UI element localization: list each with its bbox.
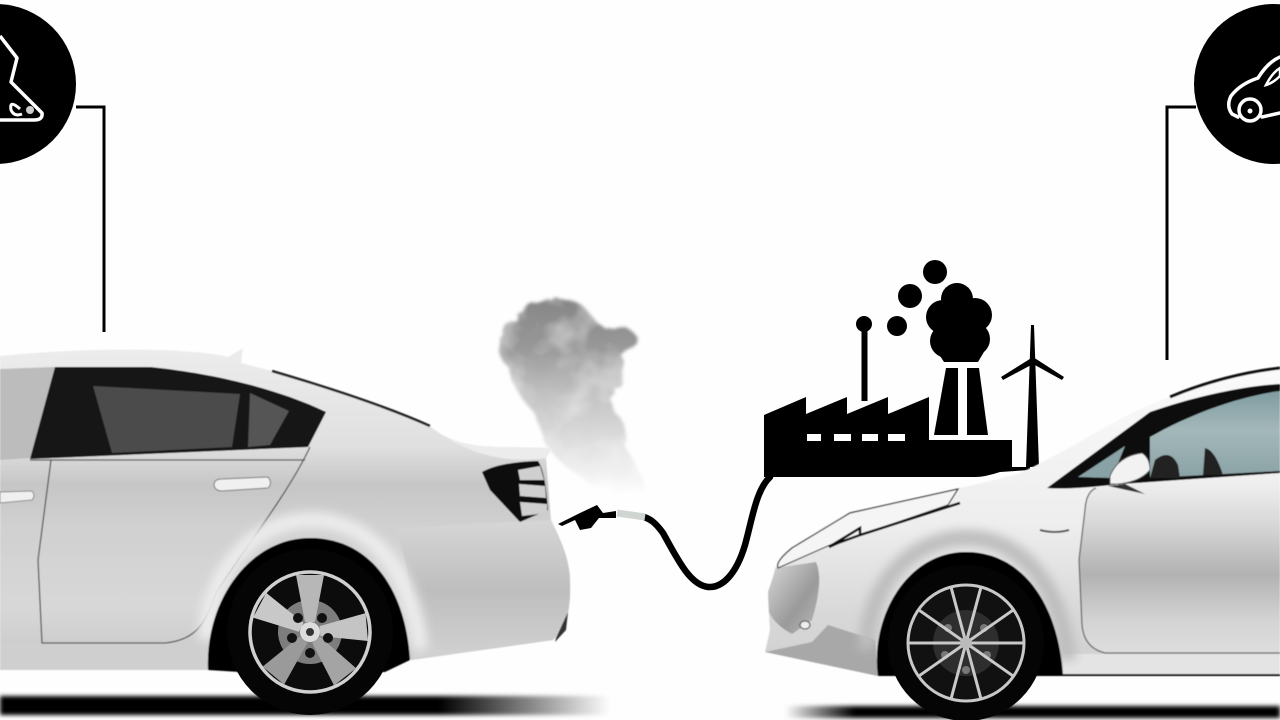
fender trim: [1040, 530, 1069, 532]
wheel arch: [208, 538, 410, 672]
rear side glass: [93, 386, 240, 453]
door handle front: [0, 491, 34, 503]
rear bumper shading: [395, 520, 570, 660]
hose collar: [617, 513, 645, 517]
icon: engine badge with connector: [0, 4, 104, 332]
window surround: [1047, 384, 1280, 489]
front quarter glass: [1078, 446, 1125, 478]
car body: [0, 348, 570, 670]
door panel: [1079, 472, 1280, 653]
car body: [765, 368, 1280, 676]
rear quarter glass: [248, 393, 289, 447]
door lines: [30, 447, 310, 643]
exhaust smoke cloud: [499, 299, 646, 493]
cooling tower: [934, 368, 958, 435]
door handle rear: [214, 477, 270, 491]
thin chimney: [862, 326, 868, 401]
wheel arch flare: [206, 520, 420, 650]
smoke puffs: [923, 260, 947, 284]
icon: electric car badge with connector: [1167, 4, 1280, 360]
bumper intake: [768, 562, 819, 634]
ground shadow: electric car: [785, 706, 1280, 718]
nozzle: [558, 505, 616, 530]
front side window: [0, 367, 55, 460]
roof edge line: [272, 371, 430, 426]
front wheel: [888, 565, 1044, 720]
wing mirror: [1110, 453, 1150, 484]
fuel nozzle and hose: [558, 477, 770, 587]
door lines: [1079, 488, 1280, 653]
headlight: [778, 489, 958, 568]
rear wheel: [227, 549, 393, 715]
trunk lid: [430, 426, 552, 460]
hose: [644, 477, 770, 587]
wheel arch flare: [866, 538, 1068, 660]
factory windows: [807, 434, 821, 441]
windscreen glass: [1150, 391, 1280, 478]
lower bumper: [765, 625, 878, 676]
sill band: [0, 620, 208, 670]
wheel arch: [877, 552, 1063, 676]
electric car: [765, 368, 1280, 676]
roof line: [1170, 368, 1280, 397]
seat silhouettes: [1150, 448, 1223, 478]
sill line: [1063, 674, 1280, 676]
factory building: [764, 397, 1030, 477]
rear bumper notch: [555, 612, 568, 642]
factory: [764, 260, 1064, 477]
factory smoke cloud: [933, 320, 988, 362]
wind turbine: [1001, 325, 1064, 467]
ground shadow: petrol car: [0, 696, 610, 715]
tail light: [482, 461, 548, 522]
fog light: [800, 621, 810, 629]
petrol car: [0, 348, 570, 672]
window surround: [30, 367, 326, 459]
lower sill panel: [1063, 654, 1280, 676]
